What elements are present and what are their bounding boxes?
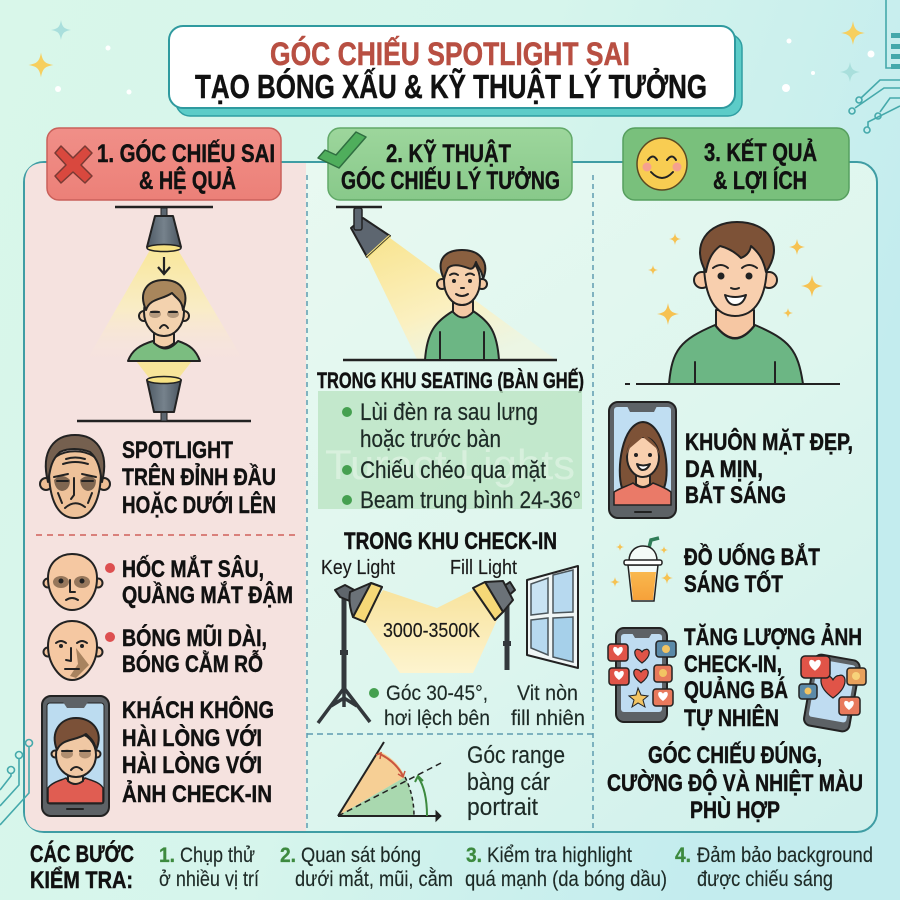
diagram: key and fill light: Fill Light bbox=[450, 557, 517, 579]
fill light stand bbox=[473, 581, 515, 670]
text block: seating area bbox=[317, 368, 584, 514]
text: beautiful face: KHUÔN MẶT ĐẸP, bbox=[685, 428, 853, 456]
footer heading: CÁC BƯỚC bbox=[30, 840, 134, 868]
step 1 bbox=[159, 844, 259, 891]
icon: old man face with harsh shadows bbox=[40, 435, 110, 518]
step 1: ở nhiều vị trí bbox=[159, 868, 259, 891]
text: angle range bbox=[467, 742, 565, 821]
text: more check-in photos: CHECK-IN, bbox=[684, 651, 782, 678]
step 4 bbox=[675, 844, 873, 891]
footer heading: KIỂM TRA: bbox=[30, 866, 133, 894]
text: more check-in photos: QUẢNG BÁ bbox=[684, 675, 788, 704]
text: drinks bbox=[684, 543, 820, 598]
arrow down bbox=[158, 257, 170, 274]
text: unhappy guests: KHÁCH KHÔNG bbox=[122, 696, 274, 724]
text: eye sockets bbox=[122, 555, 293, 609]
header: column 1: & HỆ QUẢ bbox=[139, 165, 236, 195]
sad person bbox=[128, 280, 200, 361]
text: conclusion: GÓC CHIẾU ĐÚNG, bbox=[648, 741, 822, 769]
bullet bbox=[369, 688, 379, 698]
step 2: Quan sát bóng bbox=[301, 844, 421, 867]
bullet bbox=[105, 563, 115, 573]
text block: seating area: hoặc trước bàn bbox=[360, 426, 501, 453]
circuit decoration: bottom left bbox=[0, 740, 32, 825]
header: column 2: 2. KỸ THUẬT bbox=[386, 138, 511, 168]
header: column 3: & LỢI ÍCH bbox=[713, 166, 807, 195]
header: column 2 bbox=[318, 128, 572, 200]
header: column 1 bbox=[47, 128, 281, 200]
text: conclusion bbox=[607, 741, 863, 824]
floor lamp bbox=[77, 376, 251, 421]
title box: GÓC CHIẾU SPOTLIGHT SAI bbox=[270, 36, 630, 72]
text: unhappy guests: ẢNH CHECK-IN bbox=[122, 779, 272, 808]
step 3: quá mạnh (da bóng dầu) bbox=[465, 868, 667, 891]
step 3 bbox=[465, 844, 667, 891]
icon: drink with sparkles bbox=[610, 538, 673, 601]
diagram: key and fill light: hơi lệch bên bbox=[384, 707, 490, 730]
text: angle range: portrait bbox=[467, 794, 538, 821]
text: spotlight position: TRÊN ĐỈNH ĐẦU bbox=[122, 462, 276, 491]
light beam bbox=[368, 238, 555, 359]
diagram: key and fill light: 3000-3500K bbox=[383, 620, 481, 642]
watermark panel: Turact Lights bbox=[325, 441, 575, 488]
text: drinks: SÁNG TỐT bbox=[684, 570, 783, 598]
text: eye sockets: HỐC MẮT SÂU, bbox=[122, 555, 264, 583]
header: column 3 bbox=[623, 128, 849, 200]
icon: face with deep eye sockets bbox=[44, 554, 102, 610]
text: nose shadow: BÓNG CẰM RỖ bbox=[122, 649, 263, 678]
illustration: happy person with sparkles bbox=[625, 222, 840, 384]
step 2: dưới mắt, mũi, cằm bbox=[295, 868, 453, 891]
diagram: key and fill light bbox=[318, 557, 585, 730]
step 3: Kiểm tra highlight bbox=[487, 844, 632, 867]
step 4: Đảm bảo background bbox=[697, 844, 873, 867]
text: more check-in photos bbox=[684, 622, 862, 732]
title box: TẠO BÓNG XẤU & KỸ THUẬT LÝ TƯỞNG bbox=[195, 68, 707, 105]
diagram: key and fill light: Góc 30-45°, bbox=[386, 682, 488, 705]
diagram: key and fill light: Vit nòn bbox=[517, 682, 578, 705]
text: angle range: bàng cár bbox=[467, 769, 550, 796]
diagram: key and fill light: Key Light bbox=[321, 557, 395, 579]
icon: green check bbox=[318, 132, 366, 168]
key light stand bbox=[318, 583, 382, 723]
icon: phone with unhappy selfie bbox=[42, 696, 109, 816]
footer heading bbox=[30, 840, 134, 894]
text: unhappy guests bbox=[122, 696, 274, 808]
header: column 2: GÓC CHIẾU LÝ TƯỞNG bbox=[341, 165, 560, 195]
decorative sparkles bbox=[28, 20, 874, 94]
light beams bbox=[88, 250, 242, 358]
diagram: angle range bbox=[338, 742, 441, 821]
light beam bbox=[363, 590, 497, 673]
floor bbox=[343, 359, 557, 361]
icon: phone with happy woman bbox=[609, 402, 676, 518]
text: beautiful face: BẮT SÁNG bbox=[685, 481, 786, 509]
text: beautiful face bbox=[685, 428, 853, 509]
text: spotlight position bbox=[122, 437, 276, 519]
text block: seating area: Beam trung bình 24-36° bbox=[360, 487, 581, 514]
icon: phone with social reactions right bbox=[799, 654, 866, 732]
circuit decoration: top right bbox=[849, 0, 900, 133]
text: conclusion: PHÙ HỢP bbox=[690, 796, 780, 824]
heading: check-in area: TRONG KHU CHECK-IN bbox=[344, 528, 557, 555]
step 4: 4. bbox=[675, 844, 691, 867]
text: unhappy guests: HÀI LÒNG VỚI bbox=[122, 751, 262, 779]
text block: seating area: Lùi đèn ra sau lưng bbox=[360, 399, 538, 426]
watermark panel bbox=[318, 391, 582, 509]
step 1: 1. bbox=[159, 844, 175, 867]
bullet bbox=[105, 632, 115, 642]
diagram: spotlight above and below head bbox=[77, 207, 251, 421]
header: column 1: 1. GÓC CHIẾU SAI bbox=[97, 138, 275, 168]
step 1: Chụp thử bbox=[180, 844, 255, 867]
angled lamp bbox=[336, 207, 390, 257]
diagram: angled spotlight on person bbox=[336, 207, 557, 360]
text block: seating area: TRONG KHU SEATING (BÀN GHẾ) bbox=[317, 368, 584, 393]
step 3: 3. bbox=[466, 844, 482, 867]
text: nose shadow bbox=[122, 624, 267, 678]
text: more check-in photos: TỰ NHIÊN bbox=[684, 704, 779, 732]
title box bbox=[169, 26, 742, 116]
text: drinks: ĐỒ UỐNG BẮT bbox=[684, 543, 820, 571]
footer: verification steps bbox=[30, 840, 873, 894]
step 2: 2. bbox=[280, 844, 296, 867]
header: column 3: 3. KẾT QUẢ bbox=[704, 137, 817, 167]
ceiling lamp bbox=[115, 207, 213, 252]
text: spotlight position: SPOTLIGHT bbox=[122, 437, 233, 464]
window bbox=[527, 566, 578, 668]
text: nose shadow: BÓNG MŨI DÀI, bbox=[122, 624, 267, 652]
text: spotlight position: HOẶC DƯỚI LÊN bbox=[122, 491, 276, 519]
step 2 bbox=[280, 844, 453, 891]
step 4: được chiếu sáng bbox=[697, 868, 833, 891]
icon: phone with social reactions left bbox=[608, 628, 676, 722]
text block: seating area: Chiếu chéo qua mặt bbox=[360, 457, 546, 484]
text: unhappy guests: HÀI LÒNG VỚI bbox=[122, 724, 262, 752]
main panel bbox=[24, 162, 877, 832]
text: angle range: Góc range bbox=[467, 742, 565, 769]
icon: red cross bbox=[55, 146, 92, 183]
text: eye sockets: QUẦNG MẮT ĐẬM bbox=[122, 581, 293, 609]
icon: smiley bbox=[637, 138, 687, 190]
diagram: key and fill light: fill nhiên bbox=[511, 707, 585, 730]
text: beautiful face: DA MỊN, bbox=[685, 456, 763, 483]
person bbox=[425, 250, 499, 360]
icon: face with nose and chin shadow bbox=[44, 621, 102, 680]
